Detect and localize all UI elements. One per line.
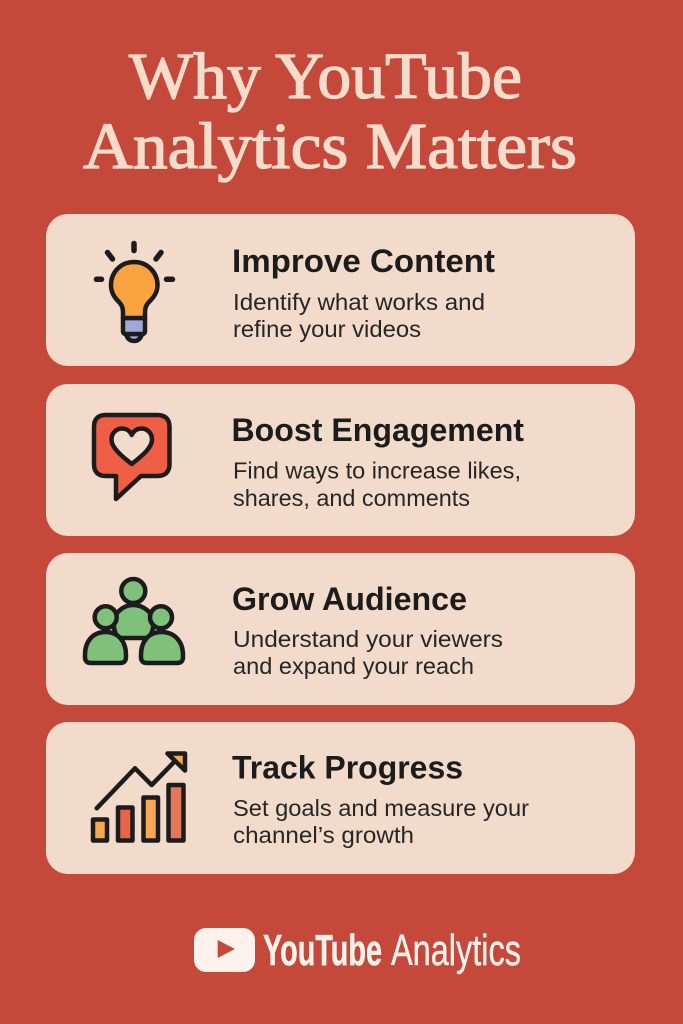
body text: and expand your reach — [233, 653, 474, 679]
heading: Boost Engagement — [232, 412, 524, 448]
logo text: Analytics — [391, 926, 521, 975]
body text: Set goals and measure your — [233, 795, 529, 821]
body text: refine your videos — [233, 316, 421, 342]
body text: shares, and comments — [233, 485, 470, 511]
title — [83, 40, 577, 183]
title: Why YouTube — [129, 40, 522, 113]
icon: growth chart — [93, 754, 185, 840]
body text: Identify what works and — [233, 289, 485, 315]
body text — [233, 626, 503, 679]
panel: track progress — [46, 722, 635, 874]
body text: Understand your viewers — [233, 626, 503, 652]
title: Analytics Matters — [83, 110, 577, 183]
panel: boost engagement — [46, 384, 635, 536]
heading: Track Progress — [232, 750, 463, 786]
logo text: YouTube — [263, 926, 382, 975]
body text — [233, 458, 521, 511]
icon: people group — [85, 579, 183, 663]
heading: Improve Content — [232, 243, 495, 279]
body text — [233, 795, 529, 848]
body text: Find ways to increase likes, — [233, 458, 521, 484]
body text — [233, 289, 485, 342]
heading: Grow Audience — [232, 581, 467, 617]
body text: channel’s growth — [233, 822, 414, 848]
icon: play button — [194, 928, 255, 972]
icon: light bulb — [96, 244, 172, 341]
panel: grow audience — [46, 553, 635, 705]
logo: YouTube Analytics — [194, 926, 521, 975]
icon: speech bubble heart — [94, 415, 170, 499]
panel: improve content — [46, 214, 635, 366]
